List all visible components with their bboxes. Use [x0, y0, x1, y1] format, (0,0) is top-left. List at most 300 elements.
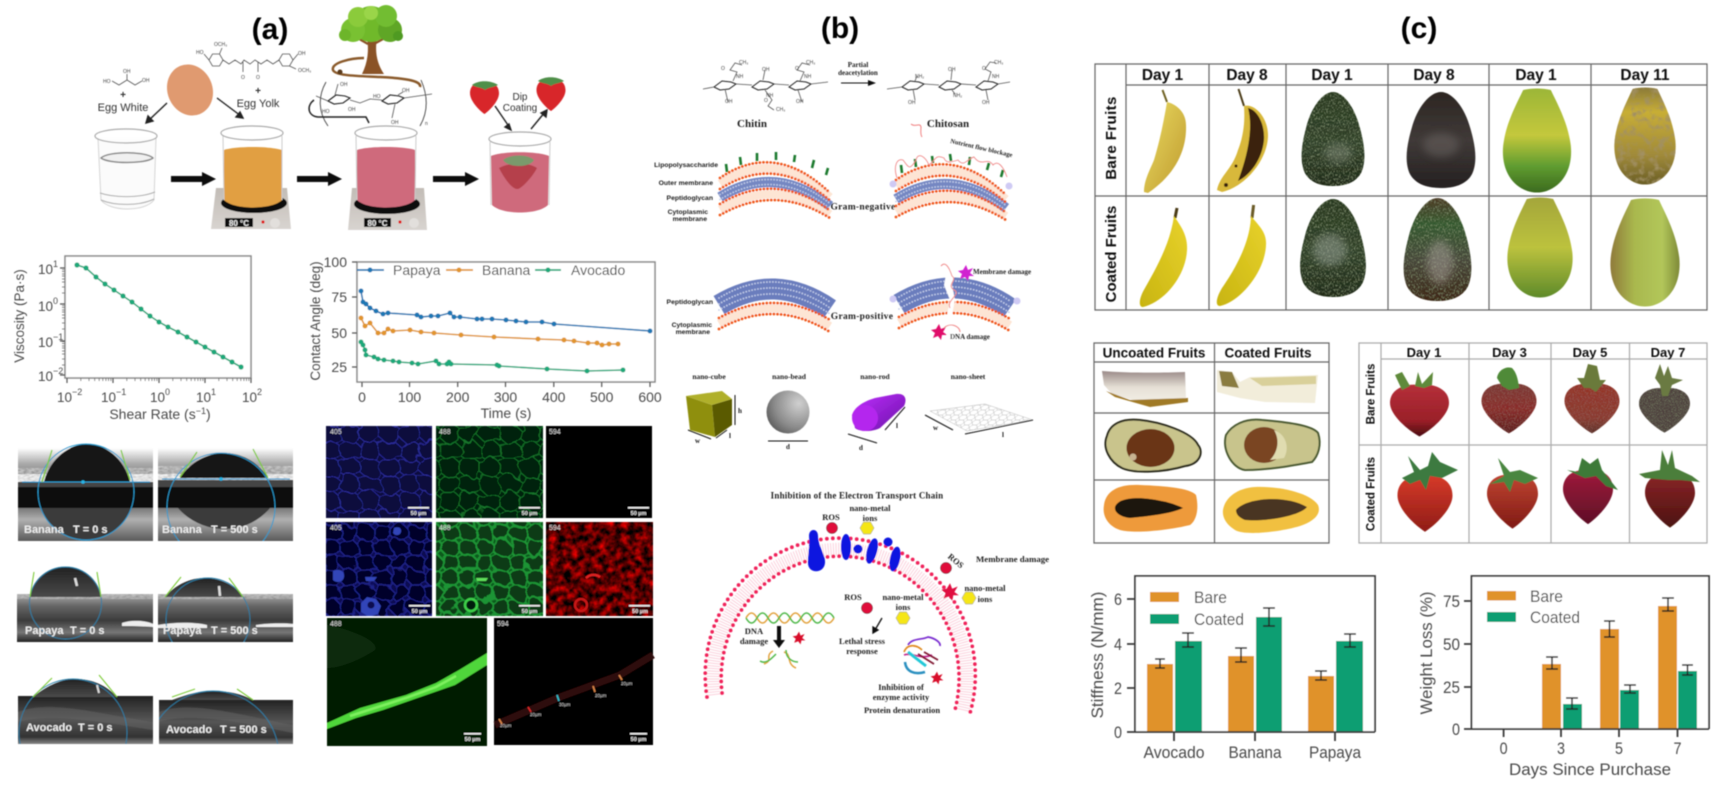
schematic: chitosan structure: OH: [948, 67, 956, 73]
microscopy: row 1, 594 channel: [546, 426, 652, 518]
arrow: deacetylation: [841, 80, 876, 86]
label: Egg White: Egg White: [98, 102, 148, 114]
nano-metal ions marker top: ions: [863, 513, 878, 523]
microscopy: row 3, 594 channel with thickness markers: 20µm: [500, 723, 512, 728]
bars: [1147, 617, 1363, 732]
axis tick labels: 10: [38, 335, 53, 350]
microscopy: row 2, 594 channel: [546, 522, 653, 616]
schematic: cellulose structure: HO: [373, 94, 381, 100]
label: Chitosan: Chitosan: [927, 118, 969, 130]
axis title: Shear Rate: −1: [196, 406, 206, 416]
arrow: into beaker: [495, 106, 511, 130]
schematic: chitin structure: CH₃: [806, 60, 815, 66]
schematic: chitin structure: CH₃: [776, 107, 785, 113]
label: Nutrient flow blockage: Nutrient flow blockage: [950, 138, 1013, 159]
chart: weight loss bars: [1417, 576, 1709, 779]
icon: membrane damage star: [958, 265, 974, 281]
label: enzyme activity inhibition: [864, 682, 940, 715]
panel a: coating preparation and characterisation: [95, 5, 566, 230]
microscopy: row 2, 488 channel: [425, 512, 553, 626]
icon: strawberry before dipping: [470, 81, 499, 114]
photo: avocado droplet T = 500 s: [147, 689, 293, 786]
label: Lethal stress response: response: [846, 646, 878, 656]
schematic: chitosan structure: NH₂: [953, 93, 962, 99]
beaker 3: chitosan mix on hot plate: 80 °C: [367, 219, 388, 228]
fruit: papaya day 1 bare: [1503, 88, 1571, 192]
legend: Coated: [1194, 610, 1244, 629]
label: Lethal stress response: [839, 636, 886, 656]
column headers: [1142, 67, 1670, 84]
photo: avocado droplet T = 0 s: T = 0 s: [78, 722, 113, 734]
axis tick labels: 50: [331, 325, 347, 341]
axis tick labels: 10: [38, 262, 53, 277]
label: Membrane damage upper: Membrane damage: [973, 268, 1031, 276]
tick labels: 2: [1114, 679, 1122, 698]
nanoparticle: nano-bead: nano-bead: [772, 372, 807, 381]
schematic: curcumin molecule: [196, 42, 311, 97]
beaker 2: yolk mix on hot plate: 80 °C: [229, 219, 249, 228]
label: Partial deacetylation: deacetylation: [838, 69, 878, 77]
legend: Avocado: [571, 262, 625, 278]
axis title: Days Since Purchase: Days Since Purchase: [1509, 760, 1671, 779]
label: Gram-negative: Gram-negative: [830, 202, 896, 212]
photo: papaya droplet T = 0 s: T = 0 s: [70, 625, 105, 637]
nanoparticle: nano-sheet: l: [1002, 431, 1004, 439]
fruit: avocado day 8 bare: [1407, 92, 1475, 188]
fruit: papaya day 1 coated: [1507, 198, 1573, 298]
nanoparticle: nano-cube: l: [729, 432, 731, 440]
beaker 3: chitosan mix on hot plate: [348, 126, 427, 230]
tick labels: 4: [1114, 635, 1122, 654]
plot frame: [1135, 576, 1375, 732]
heading: (b): (b): [821, 12, 859, 45]
tick labels: Banana: [1228, 743, 1282, 762]
cross-section: banana coated: [1217, 370, 1318, 403]
photo: papaya droplet T = 500 s: T = 500 s: [211, 625, 258, 637]
schematic: glycerol molecule: [103, 69, 150, 101]
axes: [1127, 599, 1375, 741]
nanoparticle: nano-cube: w: [695, 437, 701, 445]
data series: papaya: [358, 288, 652, 334]
heading: (a): (a): [252, 13, 288, 46]
label: enzyme activity inhibition: enzyme activity: [873, 692, 930, 702]
icon: chitosan strand: [911, 124, 922, 137]
axis tick labels: 10: [242, 390, 257, 405]
arrow: DNA damage: [773, 626, 785, 648]
photo: banana droplet T = 500 s: T = 500 s: [211, 524, 258, 536]
axis tick labels: −2: [72, 387, 82, 397]
beaker 1: egg white: [95, 129, 157, 209]
schematic: chitin structure: O: [721, 66, 725, 72]
ROS marker inside: [844, 592, 872, 614]
label: Egg Yolk: Egg Yolk: [237, 98, 280, 110]
arrow: out of beaker: [531, 110, 547, 129]
labels: gram-positive layers: membrane: [676, 329, 710, 336]
microscopy: row 2, 594 channel: 594: [549, 525, 561, 532]
schematic: glycerol molecule: +: [120, 90, 126, 101]
tick labels: Papaya: [1309, 743, 1361, 762]
fruit: banana day 1 bare: [1144, 90, 1186, 193]
label: Membrane damage lower: Membrane damage: [976, 554, 1049, 564]
icon: DNA fragments: [760, 650, 798, 668]
row label: Coated Fruits: Coated Fruits: [1366, 457, 1378, 531]
label: enzyme activity inhibition: Protein denaturation: [864, 705, 940, 715]
axes: [1464, 601, 1709, 737]
legend: Banana: [482, 262, 530, 278]
photo: banana droplet T = 500 s: [157, 448, 294, 542]
cross-section: avocado uncoated: [1105, 420, 1201, 472]
photo: papaya droplet T = 500 s: [158, 577, 293, 662]
photo: papaya droplet T = 500 s: Papaya: [163, 625, 202, 637]
labels: gram-positive layers: Cytoplasmic: [672, 322, 712, 329]
microscopy: row 3, 594 channel with thickness markers: [494, 618, 653, 745]
microscopy: row 1, 594 channel: 50 µm: [631, 511, 646, 517]
membrane: gram-positive with chitosan damage: [890, 264, 1020, 345]
schematic: curcumin molecule: OCH₃: [214, 42, 227, 48]
microscopy: row 2, 488 channel: 50 µm: [522, 609, 537, 615]
schematic: chitin structure: [703, 60, 828, 113]
nanoparticle: nano-bead: [766, 372, 810, 451]
schematic: chitin structure: OH: [725, 99, 733, 105]
membrane: gram-negative with chitosan: [890, 154, 1012, 220]
ROS marker top: [822, 512, 840, 534]
legend: Coated: [1530, 608, 1580, 627]
schematic: chitosan structure: CH₃: [994, 60, 1003, 66]
microscopy: row 3, 594 channel with thickness markers: 20µm: [621, 681, 633, 686]
nanoparticle: nano-sheet: [925, 372, 1033, 439]
axis tick labels: 600: [638, 389, 662, 405]
column headers: Day 1: [1311, 67, 1353, 84]
microscopy: row 3, 488 channel with green streak: [327, 618, 487, 746]
photo: avocado droplet T = 500 s: Avocado: [166, 724, 212, 736]
nano-metal ions marker right: ions: [978, 594, 993, 604]
fruit: avocado day 8 coated: [1404, 198, 1471, 301]
microscopy: row 3, 594 channel with thickness markers: 594: [497, 621, 509, 628]
fruit: papaya day 11 bare: [1614, 88, 1676, 185]
arrow: lethal stress: [873, 618, 882, 633]
strawberry: coated day 7: [1639, 450, 1700, 528]
nanoparticle: nano-rod: l: [896, 422, 898, 430]
column headers: Day 3: [1492, 345, 1527, 360]
axis tick labels: 10: [38, 299, 53, 314]
axis tick labels: 10: [38, 369, 53, 384]
chart: contact angle vs time: [308, 254, 662, 421]
microscopy: row 1, 594 channel: 594: [549, 429, 561, 436]
column headers: Day 1: [1142, 67, 1184, 84]
label: Gram-positive: Gram-positive: [831, 312, 893, 322]
axis tick labels: 10: [101, 390, 116, 405]
labels: gram-negative layers: Peptidoglycan: [667, 195, 713, 202]
cross-section: avocado coated: [1225, 420, 1320, 470]
axis tick labels: 200: [446, 389, 470, 405]
nano-metal ions marker inside: nano-metal: [882, 592, 924, 602]
schematic: cellulose structure: [316, 80, 432, 127]
plot frame: [1472, 576, 1709, 729]
schematic: curcumin molecule: O: [241, 75, 245, 81]
label: DNA damage lower: DNA: [745, 626, 764, 636]
axis title: Shear Rate: ): [206, 406, 211, 422]
axis title: Time: Time (s): [481, 405, 531, 421]
label: DNA damage lower: damage: [740, 636, 768, 646]
schematic: glycerol molecule: OH: [142, 78, 150, 84]
fruit: banana day 8 bare: [1217, 89, 1268, 192]
row label: Bare Fruits: Bare Fruits: [1103, 96, 1120, 180]
arrow: step 2: [297, 172, 342, 186]
tick labels: 5: [1615, 739, 1623, 758]
row label: Bare Fruits: Bare Fruits: [1366, 364, 1378, 424]
ROS marker right: ROS: [946, 551, 966, 570]
photo: avocado droplet T = 500 s: T = 500 s: [220, 724, 267, 736]
error bars: [1546, 598, 1693, 709]
legend: [1150, 588, 1244, 629]
column headers: Day 1: [1407, 345, 1441, 360]
schematic: curcumin molecule: OCH₃: [298, 68, 311, 74]
chart: viscosity vs shear rate: [12, 256, 262, 422]
labels: gram-negative layers: Outer membrane: [659, 180, 713, 187]
axis tick labels: 10: [57, 390, 72, 405]
labels: gram-negative layers: membrane: [673, 216, 707, 223]
axis tick labels: 0: [165, 387, 170, 397]
legend: Bare: [1194, 588, 1227, 607]
axis tick labels: 10: [150, 390, 165, 405]
column headers: Coated Fruits: [1224, 346, 1312, 360]
icon: egg: [159, 57, 221, 123]
icon: protein ribbon: [904, 637, 940, 673]
axis tick labels: 25: [331, 359, 347, 375]
microscopy: row 3, 488 channel with green streak: 50 µm: [465, 737, 480, 743]
icon: damage star near protein: [931, 672, 943, 684]
strawberry: coated day 5: [1563, 458, 1618, 524]
photo: banana droplet T = 0 s: [17, 84, 1686, 717]
chart: stiffness bars: [1088, 576, 1375, 762]
label: Dip Coating: Coating: [503, 103, 537, 114]
schematic: chitosan structure: OH: [908, 100, 916, 106]
row label: Coated Fruits: Coated Fruits: [1103, 206, 1120, 302]
tick labels: [1114, 590, 1361, 762]
arrow: egg to yolk: [217, 98, 243, 118]
table: whole fruits bare vs coated: [1095, 64, 1707, 310]
icon: damage star near DNA: [793, 632, 805, 644]
fruit: avocado day 1 coated: [1300, 199, 1366, 297]
microscopy: row 3, 488 channel with green streak: 488: [330, 621, 342, 628]
schematic: cellulose structure: OH: [391, 120, 399, 126]
label: Partial deacetylation: [838, 61, 878, 77]
axis title: Shear Rate: Shear Rate (s: [109, 406, 196, 422]
icon: damage star on membrane: [941, 583, 959, 601]
microscopy: row 2, 594 channel: 50 µm: [632, 609, 648, 615]
axis tick labels: 1: [211, 387, 216, 397]
strawberry: bare day 7: [1639, 364, 1690, 433]
column headers: Day 8: [1413, 67, 1455, 84]
nanoparticle: nano-sheet: nano-sheet: [951, 372, 986, 381]
strawberry: coated day 3: [1487, 458, 1538, 529]
nanoparticle: nano-cube: h: [738, 407, 742, 415]
column headers: Day 8: [1226, 67, 1268, 84]
column headers: Day 1: [1515, 67, 1557, 84]
table grid: [1359, 343, 1707, 543]
plot frame: [65, 256, 251, 378]
ROS marker right: [940, 551, 966, 574]
membrane: gram-positive untreated: [719, 282, 830, 332]
membrane: gram-negative untreated: [720, 152, 830, 218]
schematic: glycerol molecule: HO: [103, 79, 111, 85]
ROS marker top: ROS: [822, 512, 840, 522]
schematic: chitin structure: CH₃: [739, 60, 748, 66]
axis tick labels: 100: [398, 389, 421, 405]
ROS marker inside: ROS: [844, 592, 862, 602]
axis tick labels: 10: [196, 390, 211, 405]
axis tick labels: 2: [257, 387, 262, 397]
axis tick labels: 75: [331, 289, 347, 305]
label: DNA damage upper: DNA damage: [950, 333, 990, 341]
schematic: cellulose structure: OH: [402, 88, 410, 94]
axis tick labels: [324, 254, 662, 405]
arrow: step 3: [433, 172, 479, 186]
microscopy: row 1, 405 channel: 405: [330, 429, 342, 436]
tick labels: 6: [1114, 590, 1122, 609]
axis title: Viscosity: Viscosity (Pa·s): [12, 269, 27, 363]
schematic: chitin structure: O: [795, 66, 799, 72]
tick labels: 3: [1557, 739, 1565, 758]
heading: (c): (c): [1401, 12, 1437, 45]
axis tick labels: [38, 259, 262, 405]
tick labels: [1443, 592, 1682, 758]
microscopy: row 2, 405 channel: 405: [330, 525, 342, 532]
strawberry: bare day 3: [1482, 367, 1536, 433]
tick labels: 0: [1452, 720, 1460, 739]
axis title: Weight Loss: Weight Loss (%): [1417, 592, 1436, 714]
heading: electron transport chain: Inhibition of the Electron Transport Chain: [771, 490, 943, 500]
fruit: avocado day 1 bare: [1302, 92, 1364, 186]
axis tick labels: 1: [53, 259, 58, 269]
data series: banana: [358, 316, 620, 348]
microscopy: row 3, 594 channel with thickness markers: 50 µm: [631, 737, 646, 743]
label: Dip Coating: Dip: [512, 92, 528, 103]
photo: avocado droplet T = 0 s: Avocado: [26, 722, 72, 734]
axis tick labels: 300: [494, 389, 517, 405]
tick labels: 0: [1114, 723, 1122, 742]
schematic: chitin structure: NH: [766, 93, 774, 99]
microscopy: row 3, 594 channel with thickness markers: 30µm: [559, 702, 571, 707]
legend: [1487, 587, 1580, 627]
column headers: [1407, 345, 1685, 360]
tick labels: 0: [1500, 739, 1508, 758]
photo: banana droplet T = 0 s: T = 0 s: [73, 524, 108, 536]
table grid: [1095, 64, 1707, 310]
photo: avocado droplet T = 0 s: [18, 675, 153, 786]
schematic: glycerol molecule: OH: [123, 69, 131, 75]
microscopy: row 1, 488 channel: 50 µm: [522, 511, 537, 517]
bars: [1542, 606, 1697, 729]
icon: DNA damage star: [931, 324, 947, 340]
microscopy: row 1, 405 channel: [315, 416, 443, 528]
arrow: step 1: [171, 172, 216, 186]
labels: gram-positive layers: [667, 299, 713, 336]
schematic: chitosan structure: NH: [992, 74, 1000, 80]
column headers: Day 7: [1651, 345, 1685, 360]
nanoparticle: nano-cube: [686, 372, 742, 445]
arrow: cellulose to beaker: [309, 100, 369, 123]
microscopy: row 1, 488 channel: 488: [439, 429, 451, 436]
axis tick labels: −1: [53, 332, 63, 342]
table: strawberries over time: [1359, 343, 1707, 543]
photo: papaya droplet T = 0 s: [17, 567, 153, 642]
strawberry: coated day 1: [1398, 452, 1458, 532]
label: Chitin: Chitin: [737, 118, 767, 130]
schematic: curcumin molecule: HO: [196, 50, 204, 56]
arrow: egg to white: [146, 103, 167, 123]
schematic: curcumin molecule: OH: [298, 51, 306, 57]
microscopy: row 3, 594 channel with thickness markers: 20µm: [530, 712, 542, 717]
nano-metal ions marker top: [849, 503, 891, 534]
microscopy: row 1, 405 channel: 50 µm: [411, 511, 426, 517]
label: DNA damage lower: [740, 626, 768, 646]
photo: banana droplet T = 0 s: Banana: [24, 524, 65, 536]
column headers: Uncoated Fruits: [1103, 346, 1205, 360]
axis tick labels: 400: [542, 389, 566, 405]
label: Partial deacetylation: Partial: [848, 61, 868, 69]
axis tick labels: 500: [590, 389, 614, 405]
icon: chitosan strand near DNA: [944, 325, 960, 332]
label: Lethal stress response: Lethal stress: [839, 636, 886, 646]
schematic: chitin structure: OH: [762, 67, 770, 73]
error bars: [1155, 608, 1356, 680]
data series: viscosity: [74, 262, 244, 370]
tick labels: 50: [1443, 635, 1460, 654]
nano-metal ions marker top: nano-metal: [849, 503, 891, 513]
plot frame: [357, 262, 655, 382]
schematic: chitin structure: NH: [804, 74, 812, 80]
legend: [357, 262, 625, 278]
beaker 2: yolk mix on hot plate: [211, 126, 291, 229]
axis tick labels: −2: [53, 366, 63, 376]
column headers: Day 11: [1620, 67, 1670, 84]
axis tick labels: 0: [358, 389, 366, 405]
labels: gram-negative layers: Lipopolysaccharide: [654, 162, 718, 169]
schematic: chitosan structure: OH: [982, 100, 990, 106]
legend: Papaya: [393, 262, 441, 278]
label: enzyme activity inhibition: Inhibition of: [878, 682, 924, 692]
table grid: [1094, 343, 1329, 543]
axis title: Contact Angle: Contact Angle (deg): [308, 261, 323, 381]
strawberry: bare day 1: [1390, 372, 1449, 436]
nanoparticle: nano-cube: nano-cube: [692, 372, 726, 381]
cell membrane arc with proteins: [705, 530, 975, 713]
schematic: curcumin molecule: +: [255, 86, 261, 97]
panel b: antimicrobial mechanisms: [654, 12, 1049, 715]
schematic: curcumin molecule: O: [256, 75, 260, 81]
nanoparticle: nano-rod: nano-rod: [860, 372, 891, 381]
schematic: cellulose structure: HO: [322, 109, 330, 115]
schematic: chitosan structure: O: [982, 66, 986, 72]
cross-section: papaya uncoated: [1104, 485, 1197, 532]
tick labels: 25: [1443, 678, 1460, 697]
tick labels: 75: [1443, 592, 1460, 611]
icon: DNA helix: [746, 613, 834, 623]
microscopy: row 2, 405 channel: [315, 512, 443, 626]
fruit: banana day 1 coated: [1140, 208, 1187, 307]
schematic: chitin structure: OH: [796, 99, 804, 105]
schematic: cellulose structure: OH: [340, 82, 348, 88]
strawberry: bare day 5: [1564, 364, 1620, 433]
tick labels: Avocado: [1144, 743, 1204, 762]
labels: gram-negative layers: Cytoplasmic: [668, 209, 708, 216]
column headers: [1103, 346, 1312, 360]
schematic: chitosan structure: NH₂: [915, 74, 924, 80]
labels: gram-positive layers: Peptidoglycan: [667, 299, 713, 306]
nanoparticle: nano-sheet: w: [933, 424, 939, 432]
cross-section: papaya coated: [1223, 487, 1319, 533]
